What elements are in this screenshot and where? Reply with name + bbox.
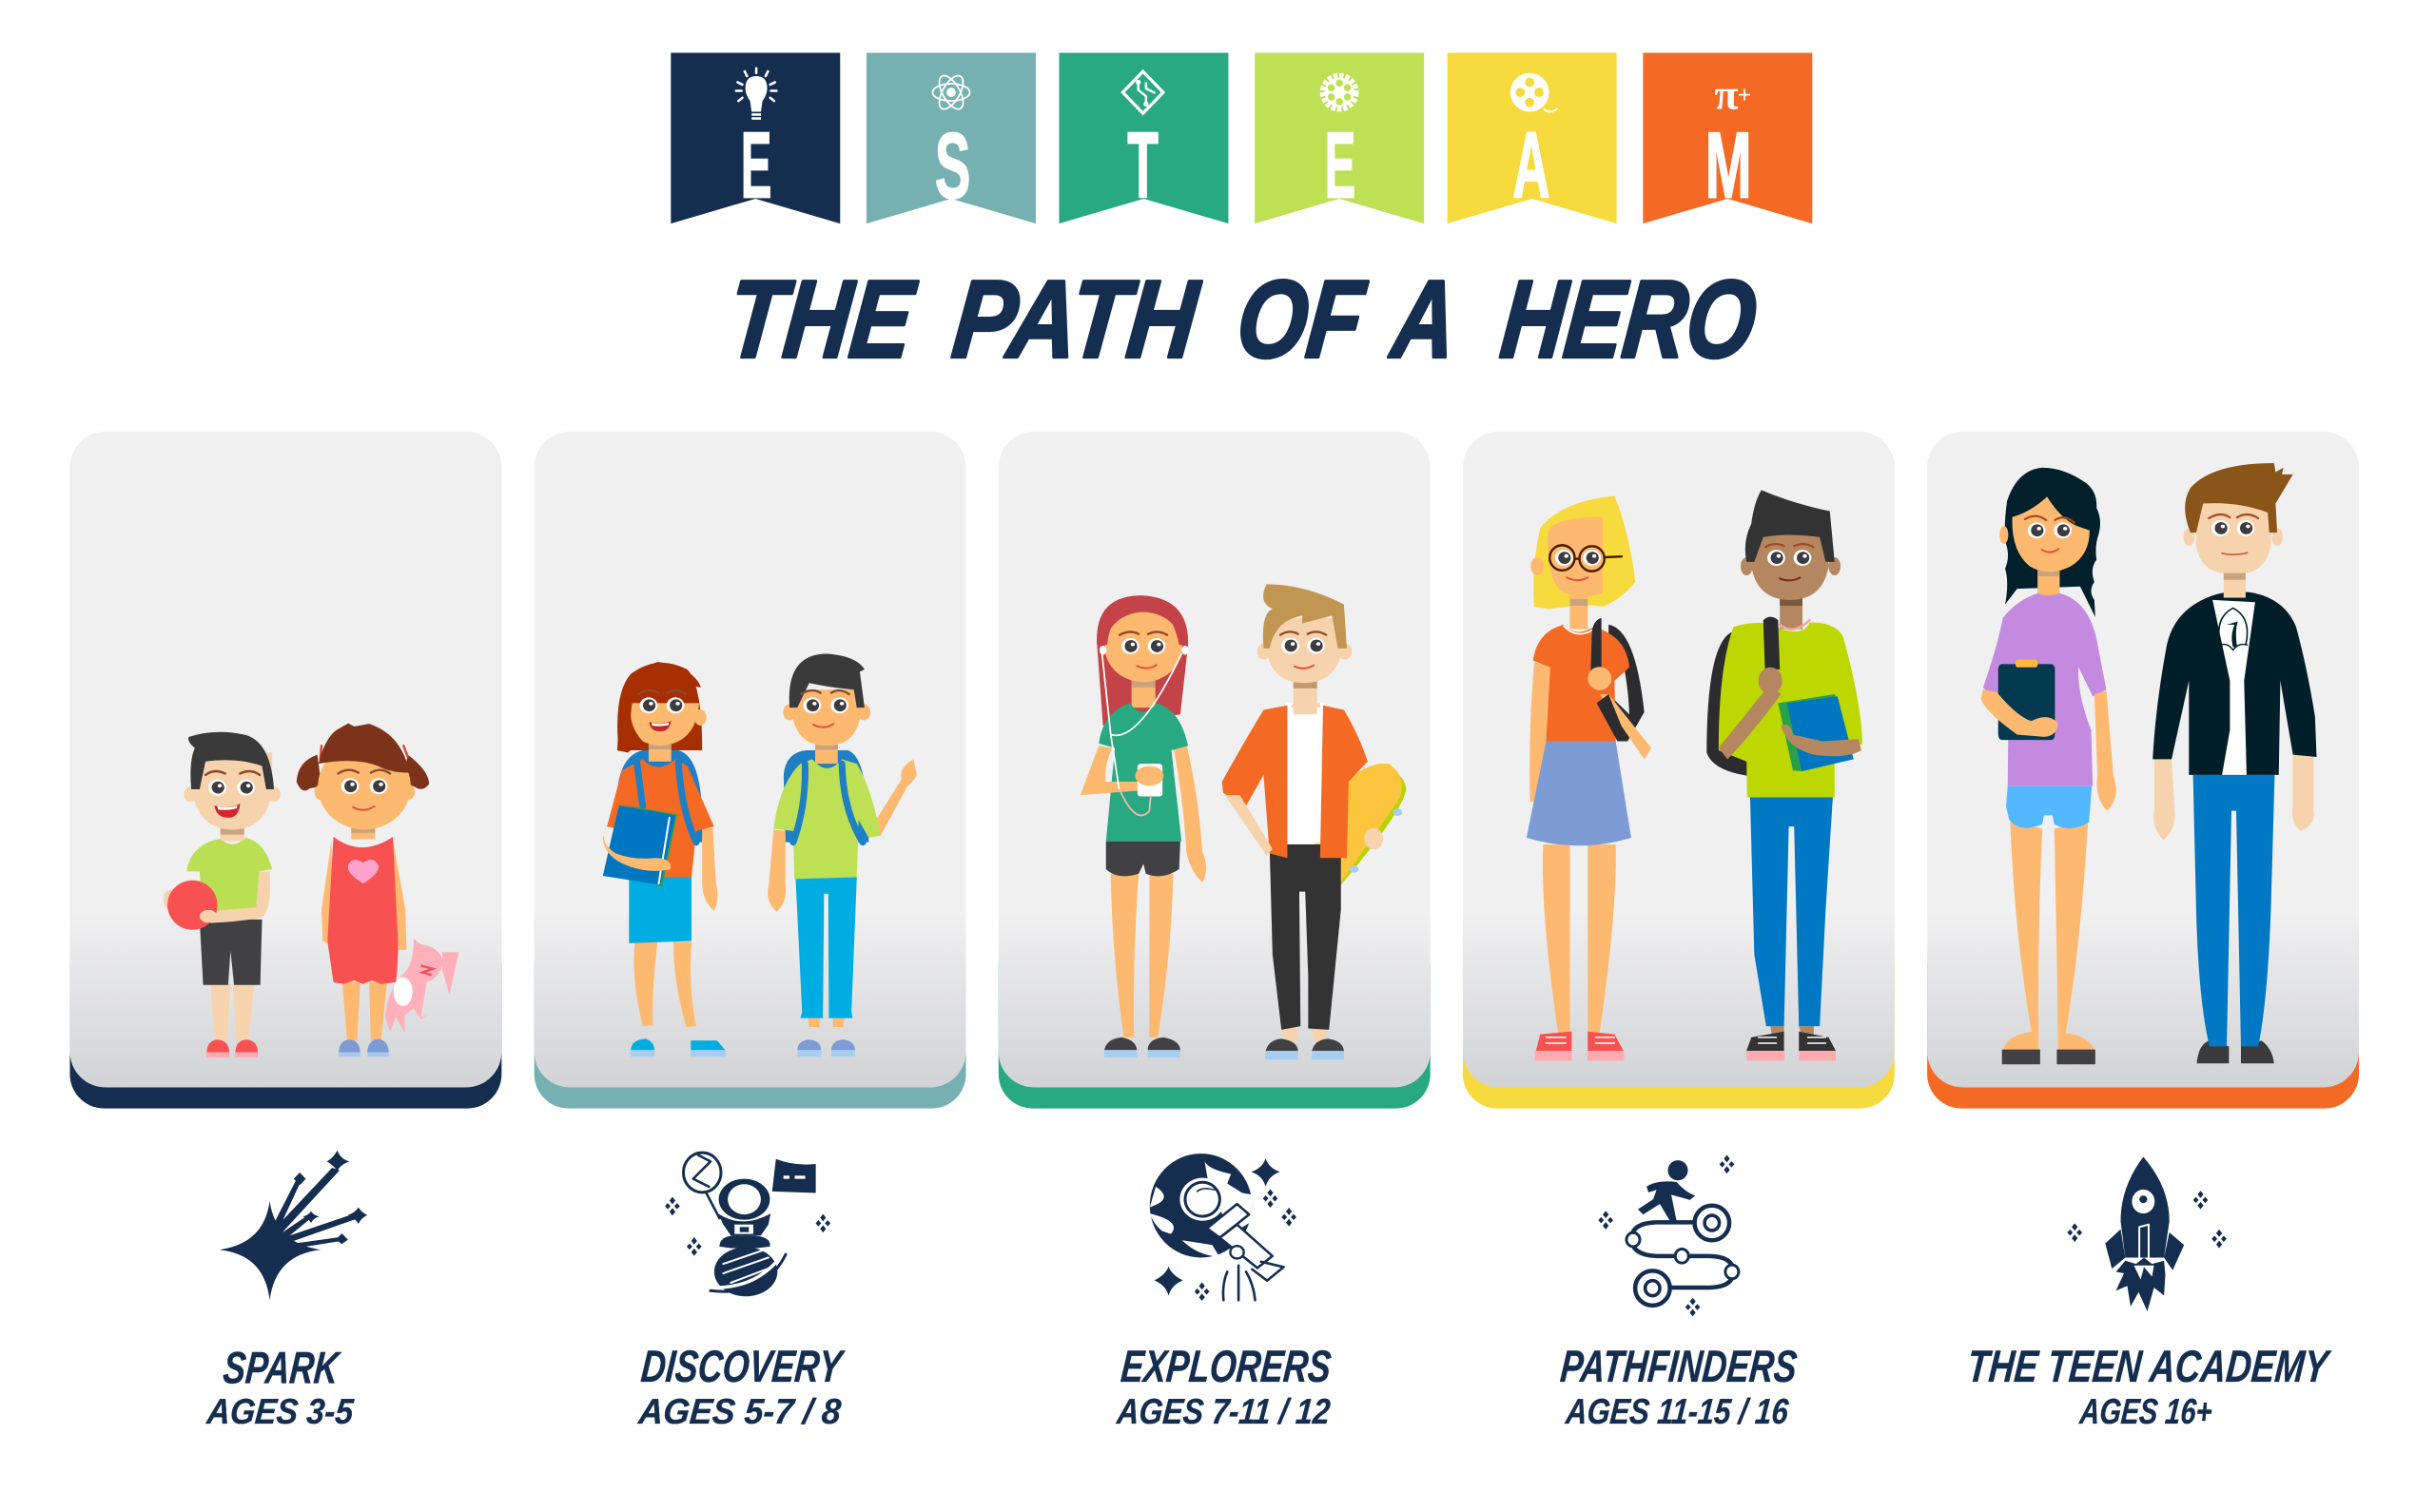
title: PATH	[947, 258, 1204, 380]
title: HERO	[1496, 258, 1762, 380]
banner: S	[867, 53, 1036, 223]
label: ages 3-5: AGES 3-5	[205, 1391, 356, 1431]
label: Spark: SPARK	[222, 1344, 343, 1393]
column: Discovery icon and label	[636, 1153, 847, 1431]
character: girl with toy rabbit	[297, 724, 458, 1056]
character: boy with skateboard	[1222, 584, 1407, 1059]
panel: Explorers characters	[999, 432, 1431, 1109]
column: Explorers icon and label	[1115, 1153, 1334, 1431]
label: Discovery: DISCOVERY	[639, 1342, 847, 1392]
banner: A: A	[1512, 112, 1549, 217]
banner: E	[1255, 53, 1424, 223]
character: boy in jacket with phoenix shirt	[2153, 463, 2317, 1063]
ESTEAM banner row	[671, 53, 1812, 223]
banner: E: E	[1325, 112, 1355, 217]
icon: globe and telescope	[1150, 1153, 1284, 1300]
panel: Teen Academy characters	[1927, 432, 2359, 1109]
character: girl with earphones	[1081, 595, 1206, 1057]
label: The Teen Academy: THE TEEN ACADEMY	[1965, 1342, 2333, 1392]
title: A	[1385, 258, 1462, 380]
title: THE	[723, 258, 922, 380]
icon: astronaut on planet	[683, 1153, 816, 1296]
character: girl with book	[603, 662, 726, 1056]
banner: T	[1059, 53, 1228, 223]
character: blonde girl with glasses	[1527, 495, 1651, 1060]
character: boy with ball	[164, 732, 281, 1057]
banner: A	[1448, 53, 1617, 223]
label: ages 11-15 / 16: AGES 11-15 / 16	[1564, 1391, 1791, 1431]
banner: M: +	[1738, 83, 1751, 108]
banner: M	[1643, 53, 1812, 223]
icon: runner on winding path	[1627, 1160, 1739, 1306]
character: boy waving	[768, 654, 917, 1056]
character: girl with clipboard	[1981, 468, 2116, 1064]
banner: M: π	[1714, 69, 1738, 118]
column: Pathfinders icon and label	[1558, 1155, 1800, 1431]
panel: Pathfinders characters	[1463, 432, 1895, 1109]
column: Teen Academy icon and label	[1965, 1156, 2333, 1431]
banner: E	[671, 53, 840, 223]
toy rabbit	[385, 939, 458, 1033]
icon: phoenix logo	[2219, 608, 2248, 650]
title: OF	[1232, 258, 1372, 380]
character: boy with book and backpack	[1706, 490, 1862, 1060]
label: ages 7-11 / 12: AGES 7-11 / 12	[1115, 1391, 1332, 1431]
banner: M: M	[1705, 112, 1752, 217]
label: ages 5-7 / 8: AGES 5-7 / 8	[636, 1391, 843, 1431]
icon: shooting stars	[220, 1151, 367, 1300]
column: Spark icon and label	[205, 1151, 367, 1431]
banner: E: E	[741, 112, 771, 217]
panel: Discovery characters	[535, 432, 966, 1109]
banner: T: T	[1127, 112, 1159, 217]
label: Pathfinders: PATHFINDERS	[1558, 1342, 1800, 1392]
label: Explorers: EXPLORERS	[1119, 1342, 1334, 1392]
panel: Spark characters	[69, 432, 501, 1109]
label: ages 16+: AGES 16+	[2077, 1391, 2214, 1431]
banner: S: S	[935, 113, 970, 218]
icon: rocket	[2105, 1156, 2184, 1311]
